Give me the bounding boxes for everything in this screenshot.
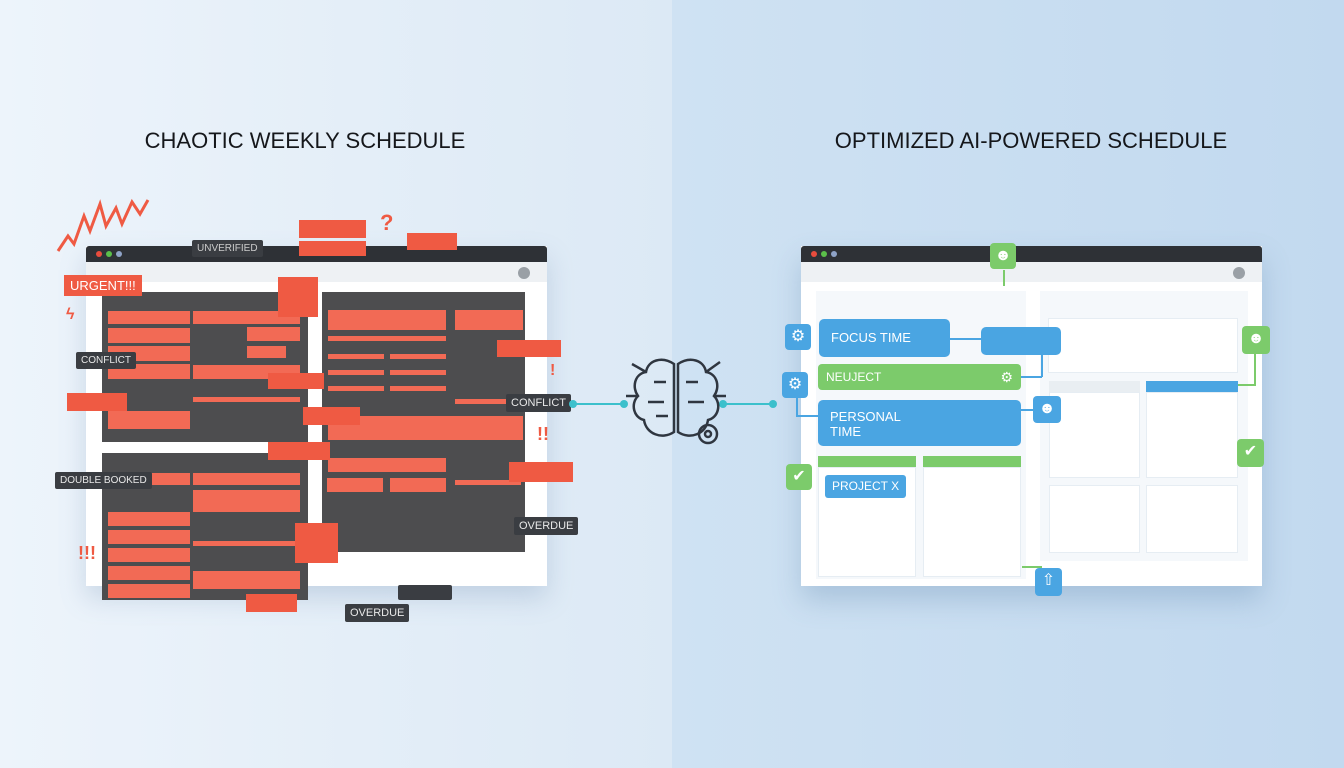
- grid: chaotic bottom-left: [102, 453, 308, 600]
- panel: chaotic calendar window: [86, 246, 547, 586]
- callout: conflict: CONFLICT: [81, 355, 131, 366]
- text: !: [550, 362, 555, 379]
- marks: ?: [380, 210, 393, 235]
- connector lines and brain icon: [572, 403, 624, 405]
- title: chaotic: CHAOTIC WEEKLY SCHEDULE: [145, 128, 465, 153]
- grid: chaotic right: [322, 292, 525, 552]
- title: optimized: OPTIMIZED AI-POWERED SCHEDULE: [835, 128, 1227, 153]
- icon: AI brain: [626, 358, 726, 444]
- text: ⇧: [1042, 572, 1055, 589]
- block: personal time: TIME: [830, 424, 861, 439]
- text: ϟ: [66, 306, 74, 323]
- callout: conflict: [76, 352, 136, 369]
- panel: optimized calendar window: [801, 246, 1262, 586]
- text: OVERDUE: [350, 607, 404, 619]
- block: neuject: [818, 364, 1021, 390]
- grid: chaotic top-left: [102, 292, 308, 442]
- icon: zigzag: [56, 199, 150, 252]
- callout: urgent: URGENT!!!: [70, 278, 136, 293]
- block: neuject: NEUJECT: [826, 370, 881, 384]
- block: focus time: FOCUS TIME: [831, 330, 911, 345]
- block: neuject: ⚙: [1000, 369, 1013, 385]
- icons: ⚙: [791, 328, 805, 345]
- callout: urgent: [64, 275, 142, 296]
- text: ✔: [792, 468, 806, 485]
- callout: project x: [825, 475, 906, 498]
- text: OVERDUE: [519, 520, 573, 532]
- text: ☻: [995, 247, 1011, 264]
- text: ✔: [1244, 443, 1257, 460]
- callout: project x: PROJECT X: [832, 479, 899, 493]
- text: ☻: [1039, 400, 1055, 417]
- connector lines: [950, 338, 981, 340]
- text: !!!: [78, 543, 96, 563]
- text: CONFLICT: [511, 397, 566, 409]
- block: personal time: [818, 400, 1021, 446]
- right column boxes: [1048, 318, 1238, 373]
- text: DOUBLE BOOKED: [60, 475, 147, 486]
- headers green: [818, 456, 916, 467]
- text: ⚙: [788, 376, 802, 393]
- block: personal time: PERSONAL: [830, 409, 901, 424]
- text: UNVERIFIED: [197, 243, 258, 254]
- block: focus time: [819, 319, 950, 357]
- text: ☻: [1248, 330, 1264, 347]
- block: blue: [981, 327, 1061, 355]
- icons: [785, 324, 811, 350]
- alerts: [299, 220, 366, 238]
- text: !!: [537, 424, 549, 444]
